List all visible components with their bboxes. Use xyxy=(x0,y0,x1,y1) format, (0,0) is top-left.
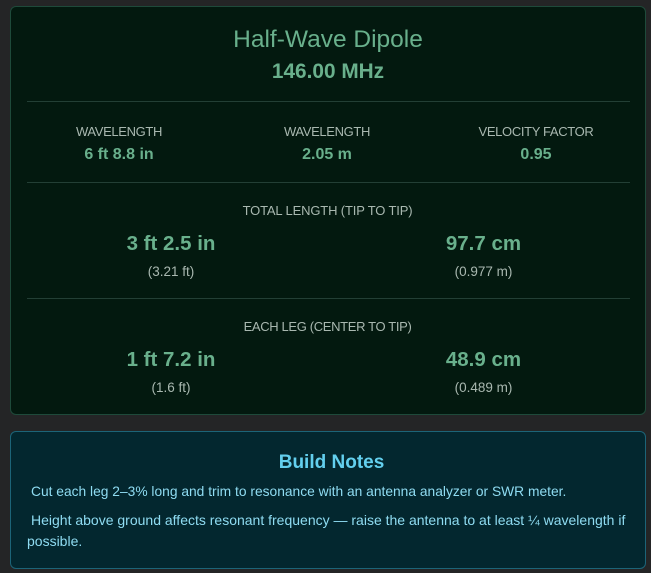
section heading: each leg: EACH LEG (CENTER TO TIP) xyxy=(244,319,411,334)
total length metric xyxy=(446,232,521,279)
stat: wavelength metric: WAVELENGTH xyxy=(284,124,370,139)
stat: velocity factor xyxy=(478,124,594,163)
note 2: Height above ground affects resonant frequency — raise the antenna to at least ¼ wavelength if xyxy=(31,512,625,528)
stat: wavelength metric: 2.05 m xyxy=(302,146,352,163)
stat: wavelength imperial: WAVELENGTH xyxy=(76,124,162,139)
total length imperial xyxy=(127,232,215,279)
total length metric: 97.7 cm xyxy=(446,232,521,255)
each leg metric xyxy=(446,348,521,395)
stat: wavelength imperial: 6 ft 8.8 in xyxy=(84,146,154,163)
frequency: 146.00 MHz xyxy=(272,60,384,83)
each leg imperial: 1 ft 7.2 in xyxy=(127,348,215,371)
panel: build notes xyxy=(10,431,646,569)
note 2: possible. xyxy=(27,533,82,549)
note 1: Cut each leg 2–3% long and trim to resonance with an antenna analyzer or SWR meter. xyxy=(31,484,566,499)
section heading: total length: TOTAL LENGTH (TIP TO TIP) xyxy=(243,203,412,218)
each leg metric: (0.489 m) xyxy=(455,380,512,394)
panel: dipole results xyxy=(10,6,646,415)
each leg imperial: (1.6 ft) xyxy=(151,380,190,394)
total length imperial: (3.21 ft) xyxy=(148,264,194,278)
stat: velocity factor: VELOCITY FACTOR xyxy=(479,124,593,139)
title: Half-Wave Dipole xyxy=(233,26,423,52)
stat: wavelength metric xyxy=(284,124,370,163)
build notes heading: Build Notes xyxy=(279,452,384,472)
each leg metric: 48.9 cm xyxy=(446,348,521,371)
stat: wavelength imperial xyxy=(76,124,162,163)
total length metric: (0.977 m) xyxy=(455,264,512,278)
stat: velocity factor: 0.95 xyxy=(520,146,552,163)
note 2 xyxy=(27,512,626,549)
each leg imperial xyxy=(127,348,215,395)
total length imperial: 3 ft 2.5 in xyxy=(127,232,215,255)
